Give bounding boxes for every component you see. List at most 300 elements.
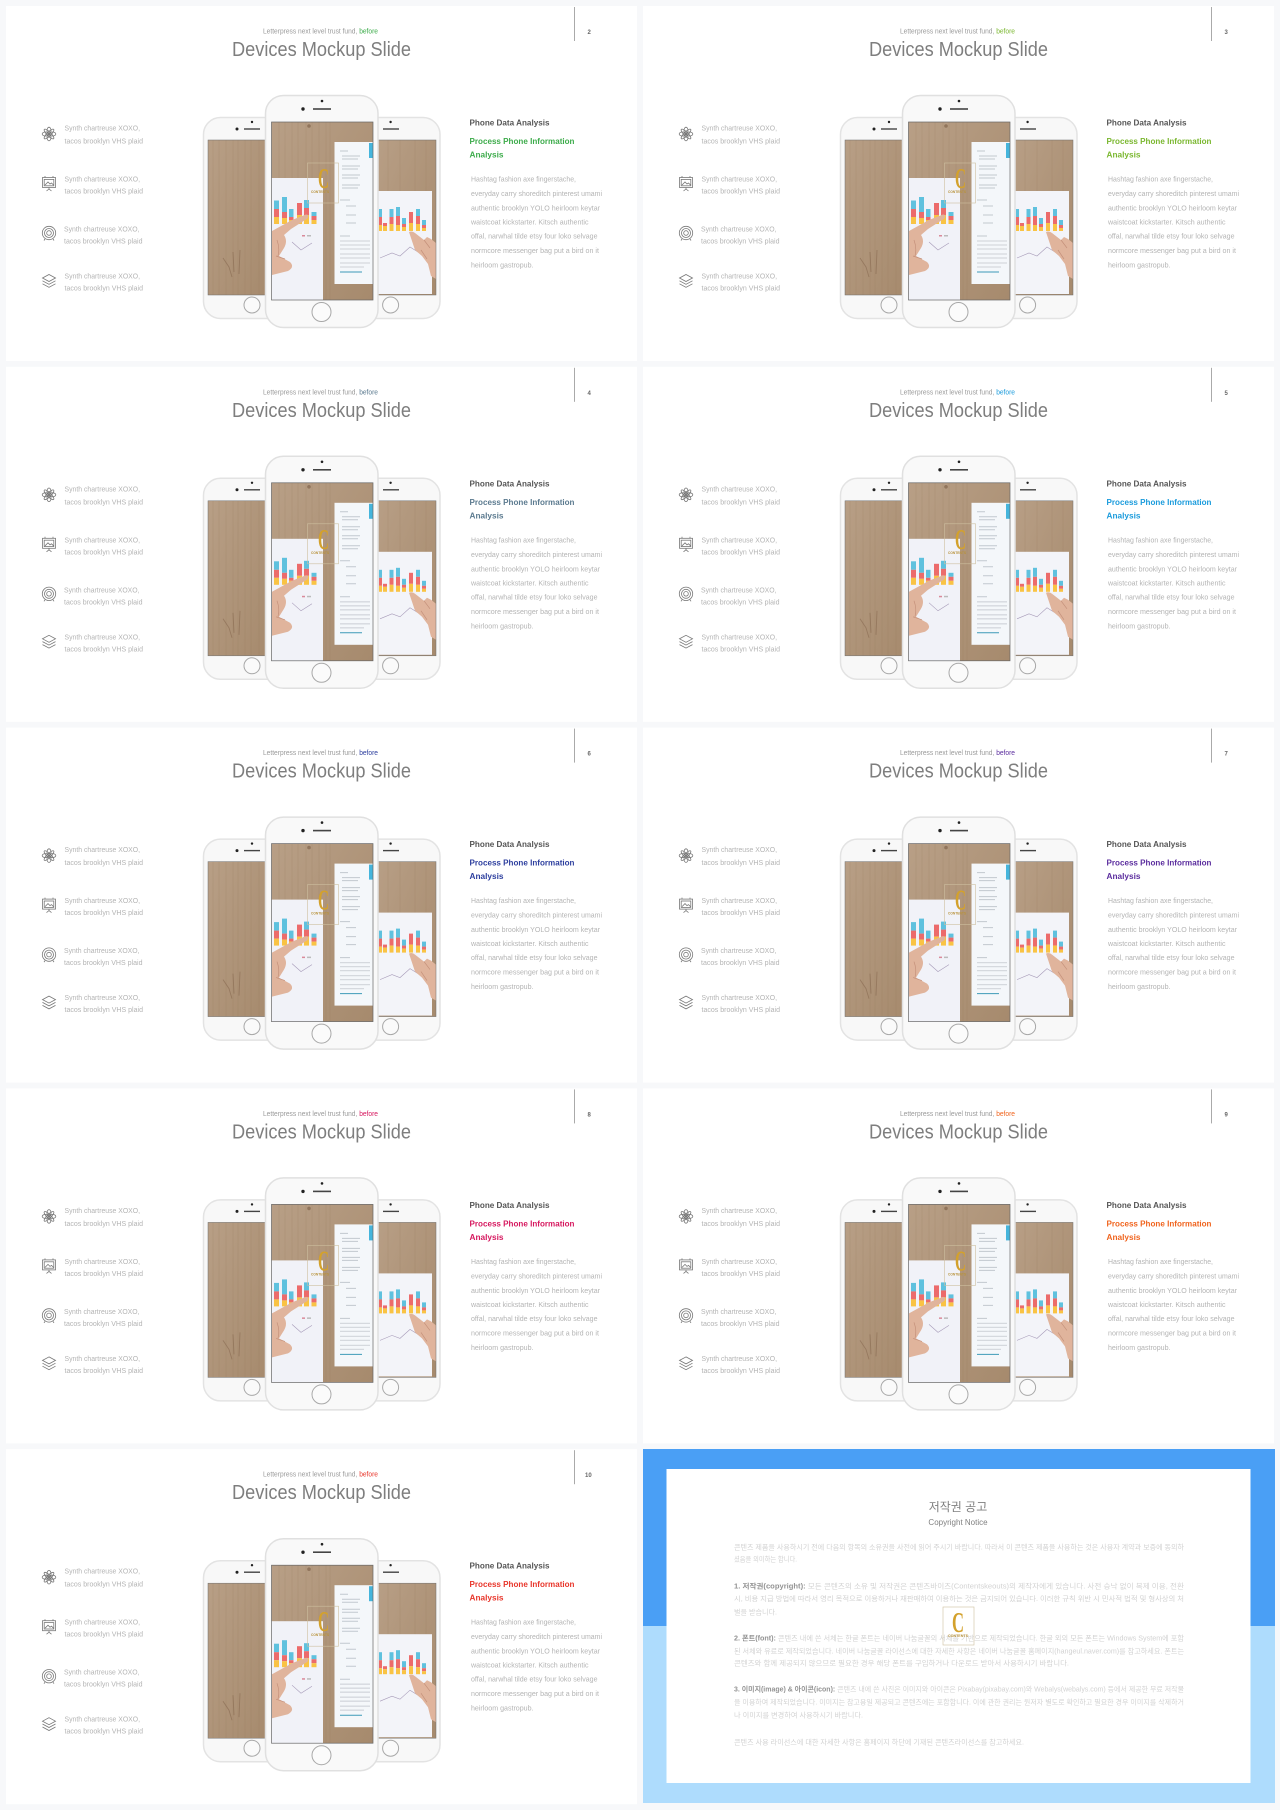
feature: layers icon and text [680, 274, 780, 292]
feature: presentation icon and text: Synth chartreuse XOXO, [702, 537, 777, 544]
feature: layers icon and text: Synth chartreuse XOXO, [64, 1356, 140, 1363]
feature: target icon and text [679, 1309, 780, 1328]
feature: layers icon and text [42, 274, 143, 292]
feature: target icon and text [679, 587, 780, 606]
text block: Hashtag fashion axe fingerstache, [1108, 898, 1213, 905]
feature: target icon and text: tacos brooklyn VHS plaid [701, 960, 780, 967]
feature: presentation icon and text [42, 898, 143, 917]
feature: flower icon and text: tacos brooklyn VHS plaid [64, 138, 143, 146]
title: Devices Mockup Slide [232, 39, 411, 61]
title: Devices Mockup Slide [232, 1121, 411, 1143]
text block: normcore messenger bag put a bird on it [1108, 970, 1236, 977]
feature: presentation icon and text: tacos brooklyn VHS plaid [64, 1271, 143, 1278]
subtitle: Letterpress next level trust fund, before [263, 1111, 378, 1118]
text block: waistcoat kickstarter. Kitsch authentic [470, 580, 589, 587]
text block: Hashtag fashion axe fingerstache, [471, 176, 576, 184]
text block: Analysis [1106, 150, 1141, 160]
feature: target icon and text: Synth chartreuse XOXO, [64, 948, 140, 955]
phone mockups: C [955, 1246, 966, 1277]
text block: normcore messenger bag put a bird on it [471, 248, 599, 255]
text block: heirloom gastropub. [471, 984, 534, 991]
text block: offal, narwhal tilde etsy four loko selvage [471, 234, 598, 240]
feature: flower icon and text: tacos brooklyn VHS plaid [702, 1221, 780, 1228]
phone mockups: CONTENTS [948, 1271, 966, 1276]
text block: everyday carry shoreditch pinterest umami [1108, 913, 1239, 920]
feature: flower icon and text: Synth chartreuse XOXO, [702, 1208, 777, 1215]
text block: everyday carry shoreditch pinterest umami [471, 1273, 602, 1280]
text block: waistcoat kickstarter. Kitsch authentic [1107, 1302, 1226, 1309]
page number: 9 [1224, 1112, 1228, 1118]
text block: Process Phone Information [1106, 1219, 1212, 1228]
copyright subtitle: Copyright Notice [928, 1518, 988, 1527]
copyright section 2 [734, 1634, 1185, 1668]
watermark: CONTENTS [948, 1633, 968, 1638]
phone mockups: CONTENTS [948, 189, 966, 194]
phone mockups: CONTENTS [311, 911, 329, 916]
feature list [42, 126, 143, 292]
copyright intro: 셨음을 의미하는 합니다. [734, 1554, 797, 1564]
phone mockups [840, 456, 1077, 688]
text block: Hashtag fashion axe fingerstache, [1108, 1259, 1213, 1266]
phone mockups [204, 456, 440, 688]
feature: layers icon and text [680, 995, 780, 1014]
feature: layers icon and text: tacos brooklyn VHS plaid [702, 1007, 780, 1014]
text block: offal, narwhal tilde etsy four loko selvage [1108, 1316, 1235, 1323]
feature: layers icon and text [680, 1356, 780, 1375]
copyright intro [734, 1542, 1185, 1564]
text block: waistcoat kickstarter. Kitsch authentic [470, 220, 589, 226]
feature: layers icon and text [42, 1356, 143, 1375]
page number: 4 [588, 391, 592, 397]
panel: slide 7 [643, 728, 1274, 1083]
text block: Analysis [470, 872, 504, 881]
feature: presentation icon and text [42, 1258, 143, 1278]
text block: everyday carry shoreditch pinterest umami [1108, 552, 1239, 559]
feature: presentation icon and text: tacos brooklyn VHS plaid [64, 549, 143, 556]
text block [470, 1562, 602, 1713]
text block: waistcoat kickstarter. Kitsch authentic [470, 941, 589, 948]
text block: heirloom gastropub. [471, 623, 534, 630]
text block: Process Phone Information [470, 1580, 575, 1589]
feature: target icon and text: Synth chartreuse XOXO, [701, 1309, 777, 1316]
text block: Phone Data Analysis [1106, 840, 1187, 849]
feature: layers icon and text [42, 1717, 143, 1736]
copyright section 1: 시, 비용 지급 방법에 따라서 영리 목적으로 이용하거나 재판매하여 이용하는 것은 금지되어 있습니다. 이러한 규칙 위반 시 민사적 법적 및 형사상의 처 [734, 1594, 1184, 1603]
text block: waistcoat kickstarter. Kitsch authentic [470, 1663, 589, 1670]
panel: slide 6 [6, 728, 637, 1083]
page number [1211, 7, 1228, 41]
subtitle: Letterpress next level trust fund, before [900, 28, 1015, 36]
phone mockups: CONTENTS [311, 189, 329, 194]
text block: offal, narwhal tilde etsy four loko selvage [1108, 234, 1235, 240]
feature: layers icon and text: Synth chartreuse XOXO, [64, 1717, 140, 1724]
text block: Phone Data Analysis [470, 840, 550, 849]
feature: presentation icon and text: Synth chartreuse XOXO, [64, 1620, 140, 1627]
feature: presentation icon and text [42, 537, 143, 556]
feature: layers icon and text [42, 995, 143, 1014]
feature: presentation icon and text: tacos brooklyn VHS plaid [702, 549, 780, 556]
feature: target icon and text: tacos brooklyn VHS plaid [64, 1321, 143, 1328]
phone mockups: C [955, 525, 966, 556]
feature: target icon and text: tacos brooklyn VHS plaid [64, 960, 143, 967]
subtitle: Letterpress next level trust fund, before [263, 28, 378, 36]
text block: normcore messenger bag put a bird on it [471, 970, 599, 977]
subtitle: Letterpress next level trust fund, before [263, 389, 378, 396]
feature: flower icon and text: Synth chartreuse XOXO, [64, 1569, 140, 1576]
page number: 6 [588, 752, 592, 758]
text block: Hashtag fashion axe fingerstache, [471, 1620, 576, 1627]
page number [574, 368, 592, 402]
subtitle: Letterpress next level trust fund, before [263, 750, 378, 757]
feature: presentation icon and text [680, 1258, 780, 1278]
feature list [42, 1208, 143, 1375]
feature: target icon and text: Synth chartreuse XOXO, [64, 1309, 140, 1316]
text block: Analysis [1106, 872, 1141, 881]
feature: target icon and text [42, 1670, 143, 1689]
feature list [42, 486, 143, 653]
feature: layers icon and text: tacos brooklyn VHS plaid [702, 1368, 780, 1375]
text block: everyday carry shoreditch pinterest umami [1108, 1273, 1239, 1280]
feature: flower icon and text [42, 486, 143, 506]
text block: everyday carry shoreditch pinterest umami [471, 552, 602, 559]
feature: layers icon and text: tacos brooklyn VHS plaid [64, 1368, 143, 1375]
page number [574, 1089, 592, 1123]
phone mockups [204, 817, 440, 1049]
feature: flower icon and text: Synth chartreuse XOXO, [702, 486, 777, 493]
phone mockups: CONTENTS [948, 550, 966, 555]
feature: presentation icon and text: Synth chartreuse XOXO, [64, 537, 140, 544]
text block: waistcoat kickstarter. Kitsch authentic [1107, 941, 1226, 948]
subtitle: Letterpress next level trust fund, before [900, 750, 1015, 757]
feature list [679, 486, 780, 653]
copyright section 3: 3. 이미지(image) & 아이콘(icon): 콘텐츠 내에 쓴 사진은 이미지와 아이콘은 Pixabay(pixabay.com)와 Webalys(webalys.com) 등에서 제공한 무료 저작물 [734, 1684, 1185, 1694]
feature: target icon and text: tacos brooklyn VHS plaid [701, 599, 780, 606]
phone mockups: C [318, 1607, 329, 1638]
feature: presentation icon and text: Synth chartreuse XOXO, [702, 176, 777, 184]
title: Devices Mockup Slide [869, 761, 1048, 783]
phone mockups [840, 817, 1077, 1049]
feature: flower icon and text: Synth chartreuse XOXO, [64, 1208, 140, 1215]
feature: target icon and text: Synth chartreuse XOXO, [701, 226, 777, 234]
feature: layers icon and text: tacos brooklyn VHS plaid [64, 646, 143, 653]
text block: everyday carry shoreditch pinterest umami [471, 1634, 602, 1641]
title: Devices Mockup Slide [869, 1121, 1048, 1143]
feature: target icon and text: Synth chartreuse XOXO, [64, 587, 140, 594]
text block: Phone Data Analysis [1106, 118, 1187, 128]
copyright title: 저작권 공고 [929, 1500, 987, 1514]
phone mockups: C [955, 164, 966, 195]
text block: offal, narwhal tilde etsy four loko selvage [471, 594, 598, 601]
feature: target icon and text [679, 226, 780, 246]
text block: normcore messenger bag put a bird on it [1108, 248, 1236, 255]
feature list [679, 1208, 780, 1375]
copyright section 2: 2. 폰트(font): 콘텐츠 내에 쓴 서체는 한글 폰트는 네이버 나눔글꼴의 서체를 기반으로 제작되었습니다. 한글 외의 모든 폰트는 Windows System에 포함 [734, 1634, 1185, 1642]
feature: flower icon and text [42, 1208, 143, 1228]
feature: target icon and text: tacos brooklyn VHS plaid [701, 1321, 780, 1328]
text block: heirloom gastropub. [1108, 262, 1171, 270]
feature: layers icon and text: tacos brooklyn VHS plaid [64, 1729, 143, 1736]
feature: layers icon and text: tacos brooklyn VHS plaid [64, 286, 143, 292]
text block: Analysis [1106, 1233, 1141, 1242]
text block: normcore messenger bag put a bird on it [471, 609, 599, 616]
phone mockups: C [318, 886, 329, 917]
feature: layers icon and text: Synth chartreuse XOXO, [702, 995, 777, 1002]
text block: Hashtag fashion axe fingerstache, [471, 1259, 576, 1266]
feature: flower icon and text: tacos brooklyn VHS plaid [64, 1582, 143, 1589]
feature: flower icon and text: tacos brooklyn VHS plaid [64, 499, 143, 506]
copyright intro: 콘텐츠 제품을 사용하시기 전에 다음의 항목의 소유권을 사전에 읽어 주시기 바랍니다. 따라서 이 콘텐츠 제품을 사용하는 것은 사용자 계약과 보증에 동의하 [734, 1542, 1185, 1552]
text block: normcore messenger bag put a bird on it [1108, 609, 1236, 616]
copyright section 3 [734, 1684, 1185, 1720]
feature: flower icon and text [679, 1208, 780, 1228]
text block: Hashtag fashion axe fingerstache, [1108, 176, 1213, 184]
phone mockups [204, 96, 440, 328]
text block: Hashtag fashion axe fingerstache, [471, 898, 576, 905]
title: Devices Mockup Slide [869, 39, 1048, 61]
text block: everyday carry shoreditch pinterest umami [471, 191, 602, 198]
copyright section 2: 된 서체와 유료로 제작되었습니다. 네이버 나눔글꼴 라이선스에 대한 자세한 사항은 네이버 나눔글꼴 홈페이지(hangeul.naver.com)를 참고하세요. 폰트는 [734, 1646, 1185, 1656]
phone mockups [204, 1178, 440, 1410]
text block: Process Phone Information [470, 859, 575, 868]
feature: flower icon and text [42, 126, 143, 146]
feature: presentation icon and text: tacos brooklyn VHS plaid [64, 910, 143, 917]
text block: offal, narwhal tilde etsy four loko selvage [1108, 955, 1235, 962]
page number [1211, 368, 1228, 402]
text block: normcore messenger bag put a bird on it [1108, 1330, 1236, 1337]
feature: layers icon and text: Synth chartreuse XOXO, [64, 995, 140, 1002]
subtitle: Letterpress next level trust fund, before [263, 1472, 378, 1479]
feature: flower icon and text: tacos brooklyn VHS plaid [702, 138, 780, 146]
feature: target icon and text: Synth chartreuse XOXO, [64, 1670, 140, 1677]
text block: authentic brooklyn YOLO heirloom keytar [471, 206, 601, 212]
text block: Analysis [470, 150, 504, 160]
feature: presentation icon and text: tacos brooklyn VHS plaid [702, 188, 780, 196]
panel: slide 9 [643, 1088, 1274, 1443]
text block: waistcoat kickstarter. Kitsch authentic [1107, 580, 1226, 587]
subtitle: Letterpress next level trust fund, before [900, 1111, 1015, 1118]
text block: authentic brooklyn YOLO heirloom keytar [471, 566, 601, 573]
watermark [943, 1607, 974, 1645]
feature: target icon and text: tacos brooklyn VHS plaid [64, 238, 143, 246]
phone mockups [840, 96, 1077, 328]
feature: presentation icon and text: Synth chartreuse XOXO, [702, 1259, 777, 1266]
page number: 2 [588, 30, 592, 36]
feature: flower icon and text [679, 847, 780, 867]
feature: layers icon and text [42, 634, 143, 653]
text block: offal, narwhal tilde etsy four loko selvage [471, 1316, 598, 1323]
copyright section 1: 1. 저작권(copyright): 모든 콘텐츠의 소유 및 저작권은 콘텐츠바이츠(Contentskeouts)의 제작자에게 있습니다. 사전 승낙 없이 복제 이용, 전환 [734, 1582, 1185, 1590]
text block: Process Phone Information [470, 137, 575, 146]
text block: Phone Data Analysis [470, 1562, 550, 1571]
text block: everyday carry shoreditch pinterest umami [1108, 191, 1239, 198]
phone mockups: CONTENTS [948, 911, 966, 916]
feature list [42, 1569, 143, 1736]
text block: offal, narwhal tilde etsy four loko selvage [471, 1677, 598, 1684]
page number: 10 [585, 1473, 592, 1479]
phone mockups [840, 1178, 1077, 1410]
text block: Process Phone Information [1106, 498, 1212, 507]
feature: target icon and text [42, 226, 143, 246]
feature: layers icon and text: Synth chartreuse XOXO, [64, 634, 140, 641]
feature: presentation icon and text: tacos brooklyn VHS plaid [64, 1632, 143, 1639]
feature: layers icon and text: Synth chartreuse XOXO, [702, 1356, 777, 1363]
feature: presentation icon and text [42, 176, 143, 196]
page number [1211, 1089, 1228, 1123]
text block: heirloom gastropub. [1108, 623, 1171, 630]
text block [1106, 1201, 1239, 1352]
feature: target icon and text [42, 948, 143, 967]
feature: flower icon and text: Synth chartreuse XOXO, [64, 486, 140, 493]
feature: presentation icon and text: Synth chartreuse XOXO, [64, 898, 140, 905]
text block: authentic brooklyn YOLO heirloom keytar [1108, 206, 1238, 212]
title: Devices Mockup Slide [232, 761, 411, 783]
feature: flower icon and text: Synth chartreuse XOXO, [702, 847, 777, 854]
phone mockups [204, 1539, 440, 1771]
feature: presentation icon and text: tacos brooklyn VHS plaid [64, 188, 143, 196]
subtitle: Letterpress next level trust fund, before [900, 389, 1015, 396]
title: Devices Mockup Slide [232, 1482, 411, 1504]
page number [1211, 729, 1228, 763]
feature: target icon and text: Synth chartreuse XOXO, [64, 226, 140, 234]
feature: target icon and text: Synth chartreuse XOXO, [701, 587, 777, 594]
feature: presentation icon and text [680, 537, 780, 556]
text block: Hashtag fashion axe fingerstache, [471, 537, 576, 544]
text block: heirloom gastropub. [1108, 984, 1171, 991]
text block: Phone Data Analysis [1106, 1201, 1187, 1210]
text block [1106, 479, 1239, 630]
copyright section 1 [734, 1582, 1185, 1616]
feature: target icon and text: tacos brooklyn VHS plaid [64, 599, 143, 606]
text block: Phone Data Analysis [1106, 479, 1187, 488]
text block: offal, narwhal tilde etsy four loko selvage [471, 955, 598, 962]
text block [1106, 118, 1239, 270]
text block [470, 1201, 602, 1352]
copyright footer note: 콘텐츠 사용 라이선스에 대한 자세한 사항은 홈페이지 하단에 기재된 콘텐츠라이선스를 참고하세요. [734, 1738, 1024, 1746]
title: Devices Mockup Slide [232, 400, 411, 422]
feature: flower icon and text: Synth chartreuse XOXO, [702, 126, 777, 132]
text block: waistcoat kickstarter. Kitsch authentic [1107, 220, 1226, 226]
feature: layers icon and text: Synth chartreuse XOXO, [702, 634, 777, 641]
page number: 7 [1224, 752, 1228, 758]
text block: authentic brooklyn YOLO heirloom keytar [471, 1288, 601, 1295]
page number: 8 [588, 1112, 592, 1118]
feature: presentation icon and text [42, 1619, 143, 1639]
page number [574, 7, 592, 41]
text block: offal, narwhal tilde etsy four loko selvage [1108, 594, 1235, 601]
feature: flower icon and text [42, 1569, 143, 1589]
feature: target icon and text [42, 1309, 143, 1328]
feature: flower icon and text: tacos brooklyn VHS plaid [702, 860, 780, 867]
copyright section 1: 벌을 받습니다. [734, 1608, 777, 1616]
copyright section 3: 을 이용하여 제작되었습니다. 이미지는 참고용일 제공되고 콘텐츠에는 포함합니다. 이에 관한 권리는 원저자 별도로 확인하고 필요한 경우 이미지를 삭제하거 [734, 1698, 1184, 1706]
text block: Analysis [470, 511, 504, 520]
feature: layers icon and text [680, 634, 780, 653]
feature: target icon and text: tacos brooklyn VHS plaid [701, 238, 780, 246]
text block: authentic brooklyn YOLO heirloom keytar [471, 927, 601, 934]
text block: Process Phone Information [470, 498, 575, 507]
panel: slide 2 [6, 6, 637, 361]
feature: flower icon and text [42, 847, 143, 867]
feature list [42, 847, 143, 1014]
panel: copyright notice [643, 1449, 1275, 1803]
feature: flower icon and text: Synth chartreuse XOXO, [64, 126, 140, 132]
panel: slide 5 [643, 367, 1274, 722]
text block: authentic brooklyn YOLO heirloom keytar [1108, 927, 1238, 934]
feature: target icon and text: Synth chartreuse XOXO, [701, 948, 777, 955]
feature: layers icon and text: tacos brooklyn VHS plaid [702, 286, 780, 292]
feature list [679, 126, 780, 292]
feature: flower icon and text [679, 126, 780, 146]
text block: normcore messenger bag put a bird on it [471, 1330, 599, 1337]
text block: Phone Data Analysis [470, 118, 550, 128]
feature: target icon and text [42, 587, 143, 606]
page number: 5 [1224, 391, 1228, 397]
text block: heirloom gastropub. [1108, 1345, 1171, 1352]
feature: presentation icon and text: Synth chartreuse XOXO, [64, 1259, 140, 1266]
page number [574, 1450, 592, 1484]
phone mockups: CONTENTS [311, 550, 329, 555]
phone mockups: CONTENTS [311, 1271, 329, 1276]
feature: presentation icon and text: Synth chartreuse XOXO, [64, 176, 140, 184]
feature: layers icon and text: tacos brooklyn VHS plaid [64, 1007, 143, 1014]
feature: presentation icon and text [680, 176, 780, 196]
text block: Process Phone Information [470, 1219, 575, 1228]
watermark: C [952, 1608, 964, 1639]
phone mockups: C [318, 164, 329, 195]
text block: authentic brooklyn YOLO heirloom keytar [471, 1649, 601, 1656]
text block: Process Phone Information [1106, 859, 1212, 868]
feature: flower icon and text: tacos brooklyn VHS plaid [64, 1221, 143, 1228]
text block: heirloom gastropub. [471, 262, 534, 270]
feature: target icon and text [679, 948, 780, 967]
feature: layers icon and text: tacos brooklyn VHS plaid [702, 646, 780, 653]
text block: Analysis [470, 1233, 504, 1242]
feature: flower icon and text: Synth chartreuse XOXO, [64, 847, 140, 854]
feature: flower icon and text: tacos brooklyn VHS plaid [64, 860, 143, 867]
panel: slide 10 [6, 1449, 637, 1804]
feature: presentation icon and text: tacos brooklyn VHS plaid [702, 910, 780, 917]
text block: authentic brooklyn YOLO heirloom keytar [1108, 566, 1238, 573]
text block: Analysis [470, 1594, 504, 1603]
text block: Phone Data Analysis [470, 1201, 550, 1210]
phone mockups: C [318, 525, 329, 556]
phone mockups: C [318, 1246, 329, 1277]
phone mockups: CONTENTS [311, 1632, 329, 1637]
panel: slide 8 [6, 1088, 637, 1443]
text block: heirloom gastropub. [471, 1345, 534, 1352]
feature: layers icon and text: Synth chartreuse XOXO, [64, 274, 140, 280]
page number [574, 729, 592, 763]
panel: slide 3 [643, 6, 1274, 361]
text block: Process Phone Information [1106, 137, 1212, 146]
panel: slide 4 [6, 367, 637, 722]
feature: flower icon and text: tacos brooklyn VHS plaid [702, 499, 780, 506]
feature: presentation icon and text: Synth chartreuse XOXO, [702, 898, 777, 905]
text block: Analysis [1106, 511, 1141, 520]
text block: Phone Data Analysis [470, 479, 550, 488]
text block: normcore messenger bag put a bird on it [471, 1691, 599, 1698]
page number: 3 [1224, 30, 1228, 36]
text block: authentic brooklyn YOLO heirloom keytar [1108, 1288, 1238, 1295]
text block [470, 479, 602, 630]
feature: flower icon and text [679, 486, 780, 506]
text block: waistcoat kickstarter. Kitsch authentic [470, 1302, 589, 1309]
text block: everyday carry shoreditch pinterest umami [471, 913, 602, 920]
text block: Hashtag fashion axe fingerstache, [1108, 537, 1213, 544]
feature: target icon and text: tacos brooklyn VHS plaid [64, 1682, 143, 1689]
text block: heirloom gastropub. [471, 1706, 534, 1713]
title: Devices Mockup Slide [869, 400, 1048, 422]
